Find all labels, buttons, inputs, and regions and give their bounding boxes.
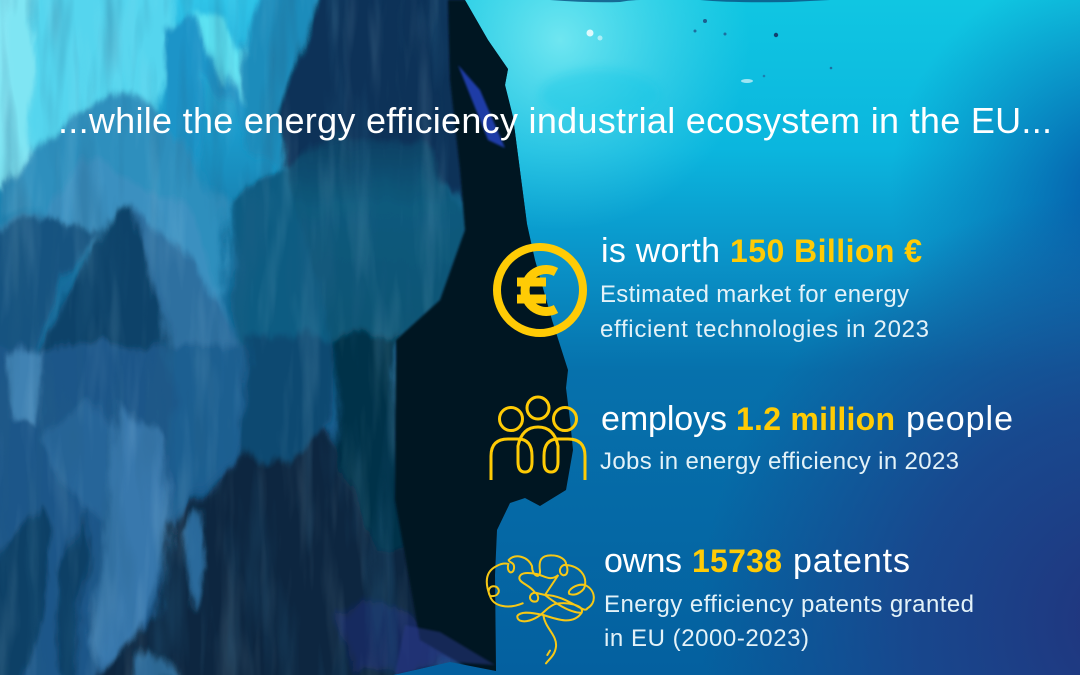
stat: market value — [497, 232, 929, 343]
description: patents granted — [604, 591, 974, 652]
description: estimated market: Estimated market for energy — [600, 281, 909, 308]
heading: owns 15738 patents: patents — [793, 542, 910, 580]
illustration: iceberg silhouette — [0, 0, 600, 675]
heading: employs 1.2 million people: employs — [601, 400, 727, 438]
heading: employs 1.2 million people — [601, 400, 1013, 438]
heading: owns 15738 patents — [604, 542, 910, 580]
title: ...while the energy efficiency industrial ecosystem in the EU... — [58, 100, 1052, 141]
description: patents granted: Energy efficiency patents granted — [604, 591, 974, 618]
heading: is worth 150 Billion euro — [601, 232, 922, 270]
heading: is worth 150 Billion euro: 150 Billion € — [730, 233, 922, 269]
stat: patents — [487, 542, 974, 663]
description: patents granted: in EU (2000-2023) — [604, 625, 809, 652]
heading: owns 15738 patents: owns — [604, 542, 682, 580]
dark cliff band — [394, 0, 573, 671]
heading: employs 1.2 million people: people — [906, 400, 1013, 438]
icon: euro coin — [497, 247, 583, 333]
heading: is worth 150 Billion euro: is worth — [601, 232, 720, 270]
description: estimated market: efficient technologies in 2023 — [600, 316, 929, 343]
stat: employment — [491, 397, 1013, 480]
description: estimated market — [600, 281, 929, 343]
icon: brain squiggle — [487, 555, 594, 663]
heading: owns 15738 patents: 15738 — [692, 543, 782, 579]
icon: three people — [491, 397, 585, 480]
description: jobs: Jobs in energy efficiency in 2023 — [600, 448, 959, 475]
heading: employs 1.2 million people: 1.2 million — [736, 401, 895, 437]
